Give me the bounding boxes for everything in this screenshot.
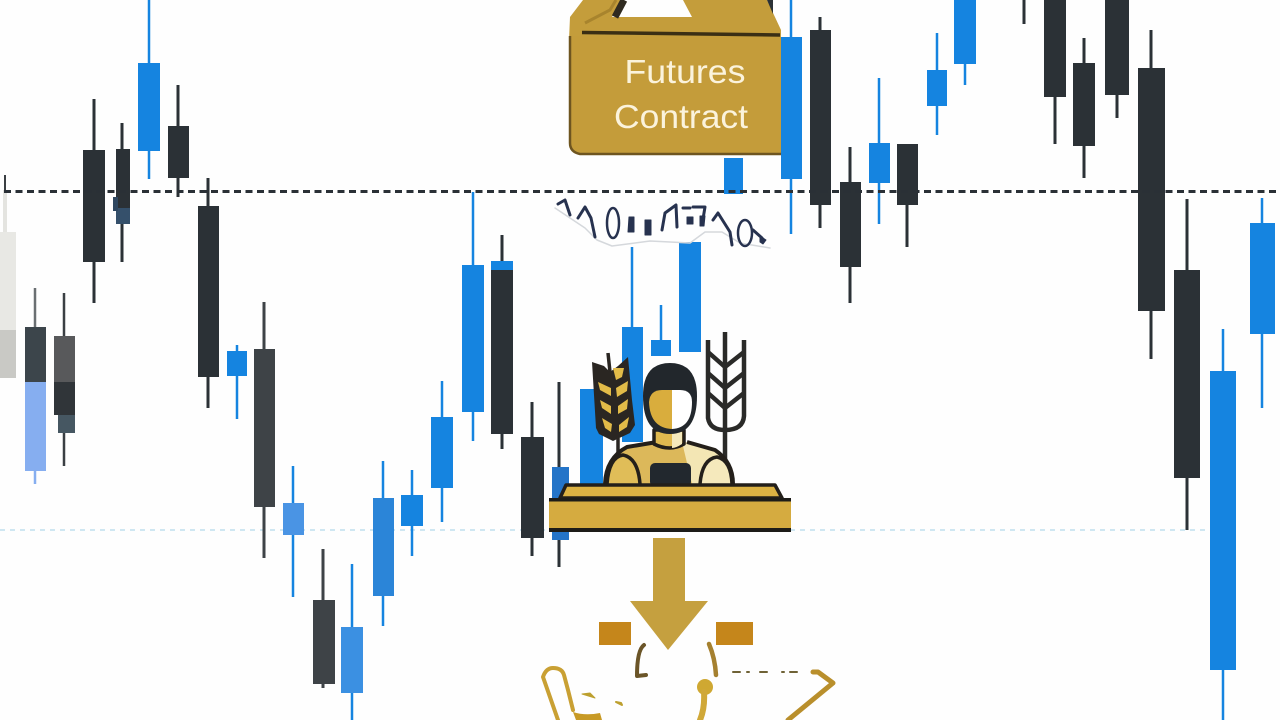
icon: delivery blocks xyxy=(599,622,753,645)
squiggle price line xyxy=(555,200,770,248)
icon: futures contract box xyxy=(569,0,781,155)
farmer arms xyxy=(607,455,640,484)
dark candles xyxy=(83,0,1200,567)
icon: partial delivery outline xyxy=(543,644,833,720)
farmer neck xyxy=(654,430,684,448)
grey candles xyxy=(254,302,335,688)
table front xyxy=(549,500,791,530)
outlined wheat stalk xyxy=(708,332,744,486)
farmer body xyxy=(605,442,733,484)
farmer head and hair xyxy=(643,363,697,434)
table xyxy=(549,485,791,532)
farmer face xyxy=(649,390,672,429)
icon: farmer with wheat at table xyxy=(549,332,791,532)
gold wheat stalk xyxy=(592,353,635,486)
box label: Futures xyxy=(624,53,746,90)
farmer apron pocket xyxy=(650,463,691,487)
arrow: down to delivery xyxy=(630,538,708,650)
faded candles at left edge xyxy=(0,175,75,484)
box label: Contract xyxy=(614,98,748,135)
table top xyxy=(560,485,782,498)
box body xyxy=(569,36,781,155)
reference line: upper dashed level xyxy=(4,190,1278,193)
box lid seam xyxy=(582,32,780,35)
reference line: lower dashed level xyxy=(0,529,1210,531)
box lid and handle xyxy=(569,0,781,40)
